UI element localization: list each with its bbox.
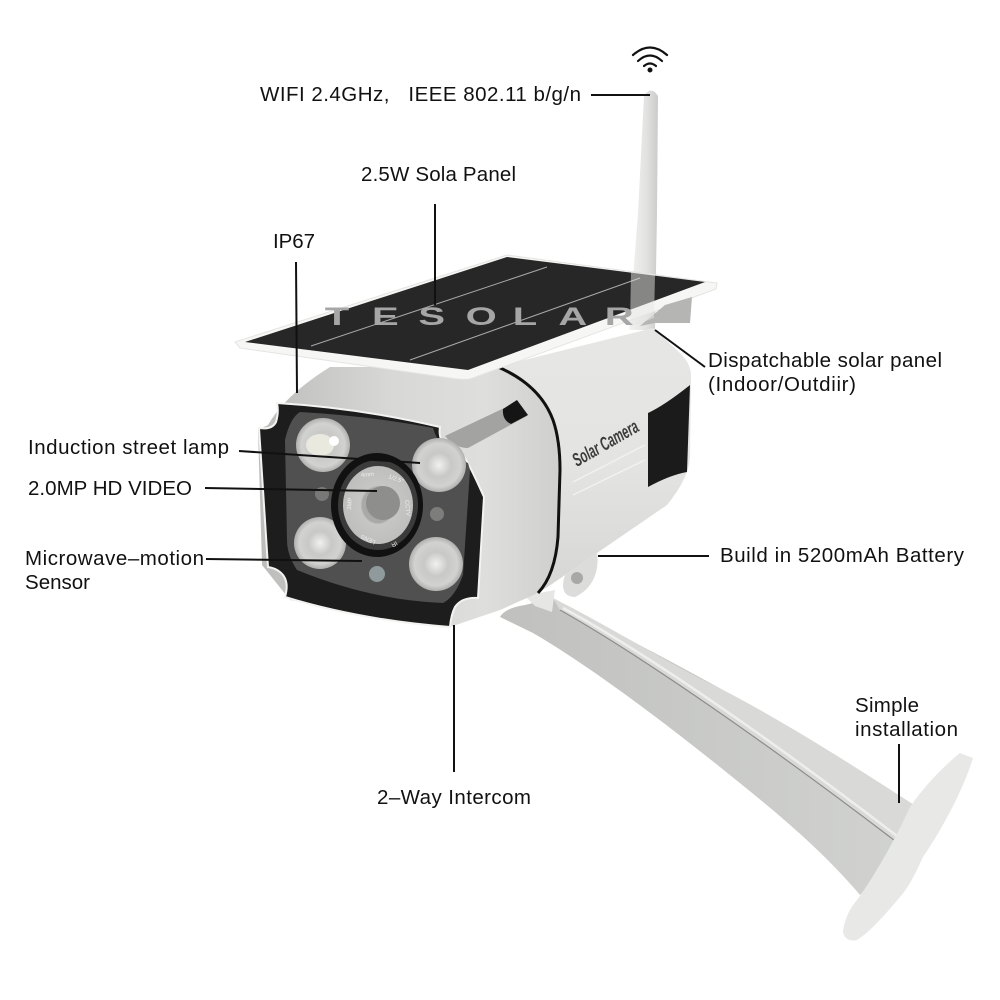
callout: microwave motion sensor: Sensor [25, 571, 90, 594]
callout: dispatchable solar panel [655, 330, 942, 396]
solar panel [235, 255, 717, 379]
front bezel [259, 403, 484, 627]
mounting arm [500, 598, 917, 895]
mounting foot plate [843, 753, 973, 941]
callout: simple installation: installation [855, 718, 958, 741]
callout: video: 2.0MP HD VIDEO [28, 477, 192, 500]
top vent slot [445, 400, 528, 448]
callout: dispatchable solar panel: Dispatchable solar panel [708, 349, 942, 372]
LED bottom left [294, 517, 346, 569]
body groove lines [573, 445, 645, 495]
callout: induction street lamp: Induction street lamp [28, 436, 229, 459]
callout: induction street lamp [28, 436, 420, 463]
watermark: TESOLAR [325, 303, 634, 331]
lens: 3MP [347, 497, 354, 510]
callout: microwave motion sensor: Microwave–motion [25, 547, 204, 570]
pivot joint [525, 553, 598, 612]
camera front housing [258, 367, 560, 627]
housing seam [498, 367, 560, 593]
brand text: Solar Camera [569, 417, 643, 471]
small sensor dots [315, 487, 444, 582]
callout: wifi: WIFI 2.4GHz, IEEE 802.11 b/g/n [260, 83, 581, 106]
antenna in front of panel [630, 272, 655, 327]
panel bracket [640, 297, 692, 326]
antenna [629, 90, 658, 330]
LED top left [296, 418, 350, 472]
cell lines [311, 267, 640, 360]
lens [331, 453, 423, 557]
callout: microwave motion sensor [25, 547, 362, 594]
callout: battery: Build in 5200mAh Battery [720, 544, 965, 567]
callout: solar panel: 2.5W Sola Panel [361, 163, 516, 186]
callout: intercom: 2–Way Intercom [377, 786, 531, 809]
lens: IR [389, 539, 398, 548]
lens: 1/2.5" [387, 474, 404, 485]
faceplate [285, 412, 470, 603]
callout: IP67: IP67 [273, 230, 315, 253]
camera rear body [500, 328, 691, 593]
icon: wifi [633, 48, 667, 71]
lens: CCTV [403, 500, 410, 516]
LED top right [412, 438, 466, 492]
callout: dispatchable solar panel: (Indoor/Outdiir) [708, 373, 856, 396]
LED bottom right [409, 537, 463, 591]
lens: LENS [360, 533, 377, 545]
callout: video [28, 477, 377, 500]
lens: 4mm [361, 472, 374, 479]
callout: simple installation: Simple [855, 694, 919, 717]
panel surface [245, 257, 705, 370]
callout: simple installation [855, 694, 958, 803]
rear dark window [648, 385, 690, 487]
